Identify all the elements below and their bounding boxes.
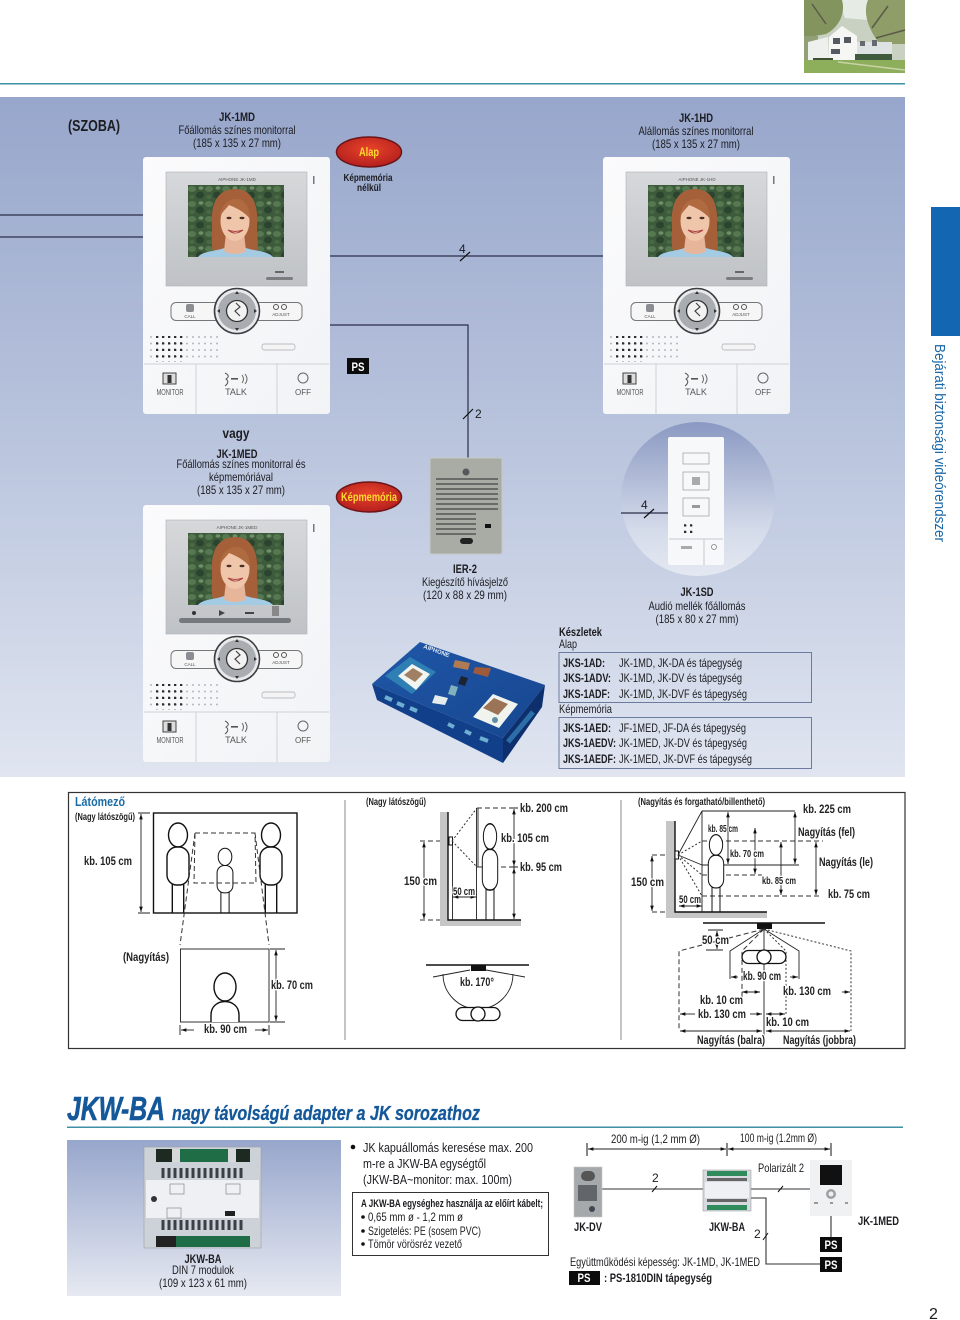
section title [67, 1090, 480, 1127]
monitor: JK-1HD: CALL [644, 314, 656, 319]
kit table: image memory: JKS-1AED: [563, 721, 611, 735]
kit table: image memory: JKS-1AEDF: [563, 752, 616, 766]
device: JK-1SD in circle [621, 422, 775, 576]
diagram: top view wide: kb. 170° [460, 975, 494, 989]
kit box product: AIPHONE [422, 644, 450, 659]
monitor: JK-1MED: MONITOR [156, 736, 184, 745]
label: JK-1SD: Audió mellék főállomás [648, 599, 746, 613]
label: vagy / JK-1MED: Főállomás színes monitorral és [176, 457, 306, 471]
label: JKW-BA: JKW-BA [184, 1252, 222, 1266]
distance span: 200 m [587, 1131, 831, 1156]
label: vagy / JK-1MED: vagy [222, 425, 250, 441]
label: JKW-BA: DIN 7 modulok [172, 1263, 235, 1277]
monitor: JK-1MED: ADJUST [272, 660, 290, 665]
blue product panel [0, 97, 905, 777]
distance span: 200 m: 100 m-ig (1.2mm Ø) [740, 1131, 817, 1145]
diagram: side view wide [404, 801, 568, 926]
note: no image memory: nélkül [357, 182, 381, 194]
label: vagy / JK-1MED [176, 425, 306, 497]
monitor: JK-1MED: OFF [295, 736, 311, 745]
diagram: side view wide: kb. 105 cm [501, 831, 549, 845]
diagram: top view wide [426, 965, 529, 1021]
PS box upper: PS [824, 1238, 838, 1252]
device: IER-2 [430, 458, 502, 554]
kit table: basic: JK-1MD, JK-DVF és tápegység [619, 687, 747, 701]
label: JK-1SD [648, 585, 746, 626]
note: no image memory: Képmemória [344, 172, 393, 184]
diagram: side view zoom: kb. 85 cm [708, 823, 738, 835]
kit table: image memory [559, 718, 812, 768]
label: JK-1MD: Főállomás színes monitorral [178, 123, 296, 137]
device: monitor small [810, 1160, 852, 1216]
PS legend [569, 1271, 712, 1285]
kit table: basic: JKS-1ADF: [563, 687, 610, 701]
diagram: side view zoom [631, 802, 873, 918]
label: IER-2 [422, 562, 508, 602]
subheading: zoom and tilt: (Nagyítás és forgatható/billenthető) [638, 796, 765, 808]
PS box lower [820, 1257, 842, 1272]
cable requirements box: 0,65 mm ø - 1,2 mm ø [368, 1210, 464, 1224]
label: JK-1MD: (185 x 135 x 27 mm) [193, 136, 281, 150]
diagram: side view wide: 150 cm [404, 874, 437, 888]
section title: JKW-BA [67, 1090, 165, 1127]
diagram: top view zoom: kb. 130 cm [698, 1007, 746, 1021]
diagram: top view zoom: Nagyítás (jobbra) [783, 1033, 856, 1047]
label: IER-2: Kiegészítő hívásjelző [422, 575, 508, 589]
label: JK-1MD: JK-1MD [219, 110, 255, 124]
subheading: wide angle: (Nagy látószögű) [75, 811, 135, 823]
wiring diagram: JKW-BA: JKW-BA [709, 1220, 745, 1234]
monitor: JK-1HD [603, 157, 790, 414]
label: JK-1HD: JK-1HD [679, 111, 713, 125]
kit table: basic: JKS-1AD: [563, 656, 605, 670]
diagram: side view zoom: kb. 75 cm [828, 887, 870, 901]
kit list [559, 625, 812, 768]
kit table: basic: JK-1MD, JK-DV és tápegység [619, 671, 742, 685]
diagram: side view zoom: kb. 85 cm [762, 875, 796, 887]
kit table: image memory: JK-1MED, JK-DVF és tápegység [619, 752, 752, 766]
panel: JKW-BA product [67, 1140, 341, 1296]
kit table: basic: JKS-1ADV: [563, 671, 611, 685]
label: JK-1SD: JK-1SD [680, 585, 714, 599]
monitor: JK-1MED: TALK [225, 735, 247, 745]
cable requirements box [352, 1192, 548, 1256]
feature bullet [351, 1140, 533, 1187]
label: JKW-BA: (109 x 123 x 61 mm) [159, 1276, 247, 1290]
label: vagy / JK-1MED: (185 x 135 x 27 mm) [197, 483, 285, 497]
device: JKW-BA small [703, 1170, 751, 1211]
label: vagy / JK-1MED: képmemóriával [209, 470, 273, 484]
monitor: JK-1MD: TALK [225, 387, 247, 397]
monitor: JK-1MD: ADJUST [272, 312, 290, 317]
diagram: side view wide: kb. 95 cm [520, 860, 562, 874]
wiring lines: 2 [475, 407, 482, 421]
header rule [0, 83, 905, 84]
diagram: top view zoom: 50 cm [702, 933, 729, 947]
monitor: JK-1MD: MONITOR [156, 388, 184, 397]
diagram: side view wide: 50 cm [453, 886, 475, 898]
diagram: top view zoom: kb. 10 cm [766, 1015, 809, 1029]
diagram: zoom front view: (Nagyítás) [123, 950, 169, 964]
kit box product [372, 642, 545, 763]
kit list: Készletek [559, 625, 602, 639]
wires: 2 [754, 1227, 761, 1241]
label: JK-1HD: Alállomás színes monitorral [638, 124, 754, 138]
diagram: wide angle front view: kb. 105 cm [84, 854, 132, 868]
monitor: JK-1MD: AIPHONE JK-1MD [218, 177, 257, 182]
diagram: top view zoom: kb. 10 cm [700, 993, 743, 1007]
kit table: image memory: JK-1MED, JK-DV és tápegység [619, 736, 747, 750]
label: JK-1HD [638, 111, 754, 151]
diagram: side view zoom: kb. 225 cm [803, 802, 851, 816]
PS box lower: PS [824, 1258, 838, 1272]
diagram: top view zoom [679, 923, 856, 1047]
diagram: side view zoom: 150 cm [631, 875, 664, 889]
wiring diagram: JKW-BA: JK-1MED [858, 1214, 899, 1228]
label: vagy / JK-1MED: JK-1MED [216, 447, 258, 461]
label: JK-1SD: (185 x 80 x 27 mm) [656, 612, 738, 626]
label: IER-2: (120 x 88 x 29 mm) [423, 588, 507, 602]
distance span: 200 m: 200 m-ig (1,2 mm Ø) [611, 1132, 700, 1146]
badge: Képmemória: Képmemória [341, 490, 397, 504]
monitor: JK-1HD: ADJUST [732, 312, 750, 317]
compatibility note: Együttműködési képesség: JK-1MD, JK-1MED [570, 1255, 760, 1269]
diagram: wide angle front view [84, 813, 297, 945]
heading: Látómező: Látómező [75, 794, 125, 809]
monitor: JK-1MED: CALL [184, 662, 196, 667]
label: IER-2: IER-2 [453, 562, 477, 576]
heading: room: (SZOBA) [68, 118, 120, 135]
monitor: JK-1HD: OFF [755, 388, 771, 397]
monitor: JK-1MD [143, 157, 330, 414]
cable requirements box: A JKW-BA egységhez használja az előírt kábelt; [361, 1198, 543, 1210]
diagram: side view zoom: 50 cm [679, 894, 701, 906]
device: JK-DV [574, 1167, 602, 1217]
monitor: JK-1MD: CALL [184, 314, 196, 319]
cable requirements box: Szigetelés: PE (sosem PVC) [368, 1224, 481, 1238]
monitor: JK-1MED: AIPHONE JK-1MED [217, 525, 258, 530]
PS box upper [820, 1237, 842, 1252]
device: JK-1SD in circle: 4 [641, 498, 648, 512]
wires: Polarizált 2 [758, 1161, 804, 1175]
diagram: side view zoom: kb. 70 cm [730, 848, 764, 860]
wiring diagram: JKW-BA: JK-DV [574, 1220, 602, 1234]
wires: 2 [652, 1171, 659, 1185]
side label: Bejárati biztonsági videórendszer [931, 344, 948, 542]
wiring lines: 4 [459, 242, 466, 256]
PS label [347, 358, 369, 374]
monitor: JK-1HD: AIPHONE JK-1HD [678, 177, 716, 182]
monitor: JK-1MED [143, 505, 330, 762]
diagram: top view zoom: kb. 130 cm [783, 984, 831, 998]
diagram: side view wide: kb. 200 cm [520, 801, 568, 815]
diagram: side view zoom: Nagyítás (fel) [798, 825, 855, 839]
note: no image memory [344, 172, 393, 194]
kit table: basic: JK-1MD, JK-DA és tápegység [619, 656, 742, 670]
device: JKW-BA large [144, 1147, 261, 1248]
wiring lines [0, 215, 603, 458]
diagram: zoom front view: kb. 70 cm [271, 978, 313, 992]
wiring diagram: JKW-BA [569, 1131, 899, 1285]
badge: Alap: Alap [359, 145, 379, 159]
section rule [67, 1126, 903, 1128]
kit table: basic [559, 652, 812, 702]
badge: Képmemória [336, 482, 402, 512]
label: JK-1HD: (185 x 135 x 27 mm) [652, 137, 740, 151]
kit table: image memory: JKS-1AEDV: [563, 736, 616, 750]
label: JKW-BA [159, 1252, 247, 1290]
feature bullet: (JKW-BA~monitor: max. 100m) [363, 1172, 512, 1187]
monitor: JK-1MD: OFF [295, 388, 311, 397]
section title: nagy távolságú adapter a JK sorozathoz [172, 1103, 480, 1125]
PS label: PS [352, 360, 364, 374]
badge: Alap [336, 137, 402, 167]
PS legend: : PS-1810DIN tápegység [604, 1271, 712, 1285]
monitor: JK-1HD: MONITOR [616, 388, 644, 397]
diagram: top view zoom: Nagyítás (balra) [697, 1033, 765, 1047]
diagram: side view zoom: Nagyítás (le) [819, 855, 873, 869]
diagram: zoom front view: kb. 90 cm [204, 1022, 247, 1036]
label: JK-1MD [178, 110, 296, 150]
kit list: Képmemória [559, 702, 612, 716]
kit table: image memory: JF-1MED, JF-DA és tápegység [619, 721, 746, 735]
photo: house [804, 0, 905, 73]
kit list: Alap [559, 637, 577, 651]
side tab [931, 207, 960, 336]
PS legend: PS [578, 1271, 590, 1285]
monitor: JK-1HD: TALK [685, 387, 707, 397]
panel: field of view [68, 792, 905, 1048]
feature bullet: m-re a JKW-BA egységtől [363, 1156, 486, 1171]
diagram: zoom front view [123, 949, 313, 1036]
wires [602, 1161, 831, 1264]
feature bullet: JK kapuállomás keresése max. 200 [363, 1140, 533, 1155]
cable requirements box: Tömör vörösréz vezető [368, 1237, 462, 1251]
panel dividers [345, 800, 621, 1040]
subheading: side view wide: (Nagy látószögű) [366, 796, 426, 808]
diagram: top view zoom: kb. 90 cm [743, 969, 781, 983]
